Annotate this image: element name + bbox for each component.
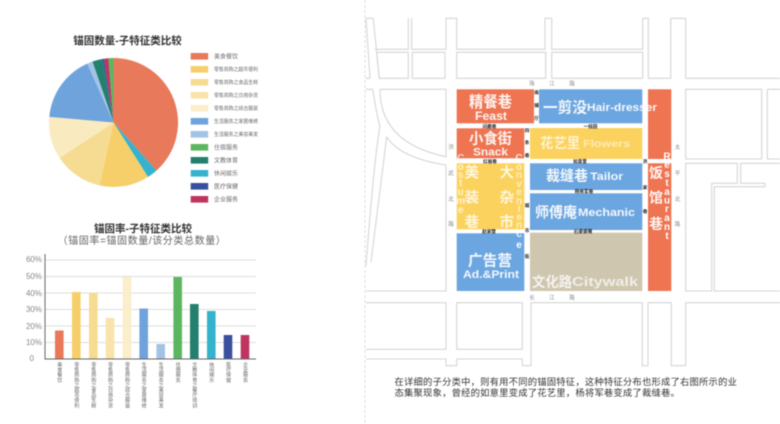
- road names: 珠: [529, 80, 535, 88]
- block: Feast: Feast: [475, 111, 507, 123]
- x axis labels: 零售商购之食品生鲜: [90, 362, 96, 409]
- panel: street map: [366, 18, 780, 366]
- block: Tailor: [530, 163, 642, 190]
- panel: bar chart of anchor rate: [26, 222, 256, 409]
- block: Feast: [457, 89, 534, 123]
- heading: bar chart title: 锚固率-子特征类比较: [94, 222, 192, 235]
- y axis labels: [26, 255, 42, 363]
- block: Costume and Convenience: o: [458, 162, 464, 173]
- legend: 零售商购之超市便利: [214, 66, 258, 73]
- block: Costume and Convenience: t: [459, 178, 463, 189]
- road names: 路: [448, 220, 454, 228]
- small street labels: 家: [643, 184, 648, 191]
- road names: 北: [448, 195, 454, 203]
- vertical label: Convenience: c: [516, 229, 522, 240]
- small street labels: 红板巷: [483, 158, 497, 165]
- road names: 路: [569, 80, 575, 88]
- block: Tailor: 裁缝巷: [546, 167, 588, 185]
- legend: 文教体育: [214, 156, 238, 164]
- block: Hair-dresser: 一剪没: [543, 98, 587, 116]
- block: Costume and Convenience: C: [457, 153, 464, 164]
- small street labels: 四: [525, 128, 530, 134]
- block: Restaurant: 饭: [649, 165, 663, 181]
- block: Mechanic: [530, 193, 642, 230]
- block: Snack: 小食街: [469, 130, 512, 148]
- block: Citywalk: [530, 233, 642, 291]
- x axis labels: 生活服务之美容美发: [158, 361, 164, 409]
- block: Tailor: Tailor: [590, 171, 624, 183]
- legend: 零售商购之综合服装: [214, 105, 258, 112]
- x axis labels: 美食餐饮: [56, 361, 62, 384]
- small street labels: 巷: [643, 209, 648, 214]
- block: Ad & Print: Ad.&Print: [463, 269, 519, 281]
- small street labels: 赵家营: [482, 228, 496, 235]
- block: Snack: [457, 128, 524, 158]
- small street labels: 洪: [643, 158, 648, 165]
- legend: 零售商购之日用杂货: [214, 92, 258, 99]
- block: Costume and Convenience: 大: [499, 164, 514, 182]
- axes: [45, 254, 256, 359]
- road names: 路: [675, 220, 681, 228]
- block: Restaurant: 馆: [649, 190, 663, 206]
- block: Feast: 精餐巷: [469, 92, 512, 111]
- pie chart: [49, 58, 178, 187]
- small street labels: 南: [534, 89, 539, 95]
- small street labels: 条: [525, 139, 530, 145]
- x axis labels: 零售商购之日用杂货: [107, 362, 113, 409]
- block: Restaurant: t: [665, 231, 669, 242]
- road names: 太: [675, 143, 681, 151]
- legend: 住宿服务: [214, 144, 238, 152]
- block: Flowers: 花艺里: [540, 135, 580, 151]
- road names: 江: [549, 80, 555, 88]
- small street labels: 市: [525, 227, 530, 234]
- small street labels: 巷: [525, 153, 530, 158]
- road names: 路: [569, 294, 575, 302]
- small street labels: 城: [525, 202, 530, 209]
- legend: 生活服务之家居维修: [214, 118, 258, 125]
- x axis labels: 企业服务: [242, 361, 248, 384]
- y axis labels: 0: [30, 354, 35, 363]
- block: Snack: Snack: [473, 146, 509, 158]
- vertical label: Convenience: e: [516, 240, 522, 251]
- legend: 生活服务之美容美发: [214, 131, 258, 138]
- vertical label: Convenience: [515, 153, 523, 251]
- small street labels: 一枝园: [584, 123, 598, 130]
- y axis labels: 20%: [26, 322, 42, 331]
- vertical label: Convenience: C: [515, 153, 523, 164]
- x axis labels: 住宿服务: [175, 361, 181, 384]
- small street labels: 石婆婆庵: [574, 228, 593, 235]
- block: Costume and Convenience: 市: [499, 213, 514, 231]
- paragraph text: 在详细的子分类中，则有用不同的锚固特征，这种特征分布也形成了右图所示的业: [394, 376, 737, 387]
- legend: 零售商购之食品生鲜: [214, 79, 258, 86]
- y axis labels: 60%: [26, 255, 42, 264]
- heading: pie chart title: 锚固数量-子特征类比较: [73, 34, 182, 47]
- block: Costume and Convenience: 美: [464, 164, 479, 182]
- block: Citywalk: Citywalk: [572, 274, 639, 289]
- block: Hair-dresser: Hair-dresser: [587, 102, 658, 114]
- y axis labels: 50%: [26, 272, 42, 281]
- x axis labels: 文教体育之餐厅培训: [191, 361, 197, 409]
- block: Costume and Convenience: 杂: [499, 190, 514, 206]
- paragraph text: [394, 376, 737, 398]
- y axis labels: 40%: [26, 289, 42, 298]
- legend: 美食餐饮: [214, 52, 238, 60]
- block: Ad & Print: 广告营: [468, 252, 512, 270]
- small street labels: 如意里: [573, 158, 587, 165]
- road names: [448, 80, 681, 302]
- small street labels: 捕: [534, 102, 539, 109]
- block: Restaurant: a: [664, 187, 670, 198]
- x axis labels: 生活服务之家居维修: [141, 361, 147, 409]
- block: Costume and Convenience: 装: [464, 190, 479, 206]
- road names: 北: [675, 195, 681, 203]
- x axis labels: 零售商购之超市便利: [73, 362, 79, 408]
- block: Mechanic: 师傅庵: [535, 204, 577, 222]
- y axis labels: 10%: [26, 338, 42, 347]
- block: Mechanic: Mechanic: [578, 207, 635, 219]
- y axis labels: 30%: [26, 305, 42, 314]
- x axis labels: 零售商购之综合服装: [124, 362, 130, 409]
- subheading: bar chart formula: （锚固率=锚固数量/该分类总数量）: [58, 234, 226, 247]
- block: Restaurant: e: [664, 160, 670, 171]
- x axis labels: 医疗保健: [225, 362, 231, 384]
- block: Costume and Convenience: s: [458, 170, 464, 181]
- legend: 企业服务: [214, 196, 238, 204]
- vertical label: Convenience: v: [516, 179, 522, 190]
- block: Flowers: Flowers: [583, 138, 630, 150]
- road names: 长: [529, 294, 535, 302]
- block: Hair-dresser: [539, 89, 658, 123]
- road names: 江: [549, 294, 555, 302]
- block: Flowers: [530, 128, 642, 159]
- road names: 平: [675, 170, 681, 177]
- small street labels: 街: [525, 253, 530, 260]
- small street labels: 问鼎巷: [483, 123, 497, 130]
- block: Restaurant: a: [664, 213, 670, 224]
- vertical label: Convenience: o: [516, 162, 522, 173]
- x axis labels: 休闲娱乐: [208, 361, 214, 383]
- road network outlines: [366, 18, 780, 366]
- vertical label: Convenience: n: [516, 196, 522, 207]
- vertical label: Convenience: n: [516, 220, 522, 231]
- small street labels: [482, 89, 648, 260]
- vertical label: Convenience: n: [516, 170, 522, 181]
- legend: [191, 52, 258, 204]
- block: Costume and Convenience: u: [458, 187, 464, 198]
- road names: 武: [448, 169, 454, 177]
- bars: [55, 277, 249, 359]
- vertical label: Convenience: e: [516, 187, 522, 198]
- block: Costume and Convenience: m: [456, 196, 465, 207]
- block: Costume and Convenience: [456, 153, 524, 231]
- block: Costume and Convenience: 巷: [464, 214, 479, 231]
- legend: 休闲娱乐: [214, 170, 238, 178]
- block: Restaurant: n: [664, 222, 670, 233]
- block: Restaurant: [648, 89, 671, 291]
- panel: pie chart of anchor count: [49, 34, 258, 204]
- vertical label: Convenience: e: [516, 212, 522, 223]
- paragraph text: 态集聚现象，曾经的如意里变成了花艺里，杨将军巷变成了裁缝巷。: [394, 387, 680, 398]
- block: Costume and Convenience: e: [458, 205, 464, 216]
- block: Ad & Print: [457, 233, 524, 291]
- block: Citywalk: 文化路: [532, 274, 572, 290]
- block: Restaurant: 巷: [649, 216, 663, 232]
- block: Restaurant: R: [663, 152, 671, 162]
- small street labels: 厅: [534, 116, 539, 122]
- block: Restaurant: s: [664, 169, 670, 180]
- small street labels: 杨将军巷: [575, 188, 594, 195]
- vertical label: Convenience: i: [518, 204, 521, 215]
- block: Restaurant: u: [664, 196, 670, 206]
- block: Restaurant: r: [665, 204, 669, 215]
- block: Restaurant: t: [665, 178, 669, 189]
- legend: 医疗保健: [214, 182, 238, 190]
- road names: 洪: [448, 143, 454, 151]
- x axis labels: [56, 361, 248, 409]
